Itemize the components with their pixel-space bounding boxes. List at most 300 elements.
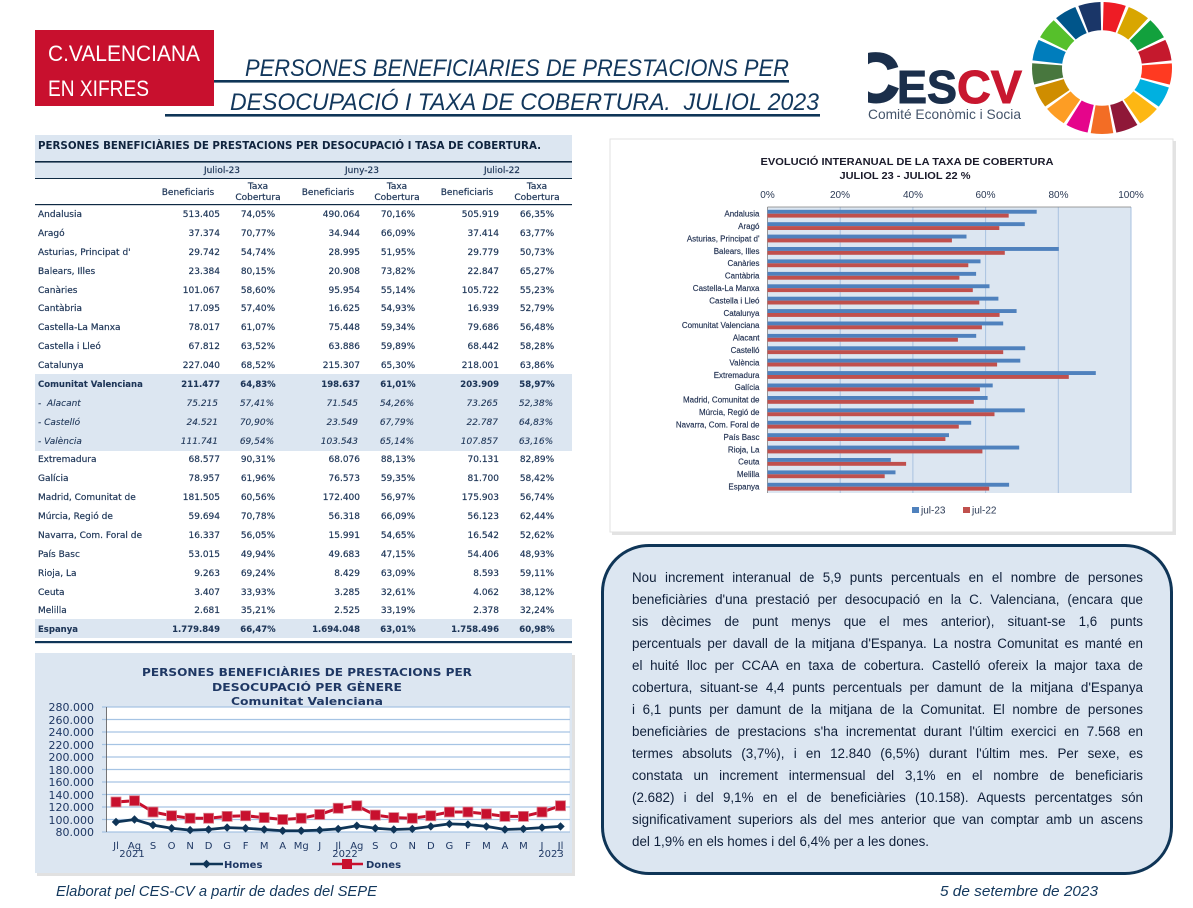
row: Canàries	[38, 286, 555, 296]
row: Espanya: 1.758.496	[451, 625, 499, 635]
row: Ceuta: 32,61%	[381, 588, 416, 598]
row: Cantàbria: 57,40%	[241, 304, 276, 314]
category labels: Comunitat Valenciana	[682, 321, 760, 330]
column headers: Cobertura	[514, 193, 560, 203]
row: València	[38, 436, 553, 447]
y axis labels: 80.000	[56, 826, 94, 839]
row: Canàries: 101.067	[183, 286, 220, 296]
axis labels: 80%	[1048, 190, 1069, 201]
category labels: Rioja, La	[728, 445, 760, 454]
axis labels: 60%	[975, 190, 996, 201]
row: Comunitat Valenciana: 64,83%	[240, 380, 276, 390]
category labels: Ceuta	[738, 458, 760, 467]
callout: commentary text box: sis dècimes de punt menys que el mes anterior), situant-se 1,6 punts	[632, 614, 1143, 629]
column headers	[162, 166, 560, 203]
row: Cantàbria: 16.939	[468, 304, 499, 314]
panel: line chart by gender	[35, 653, 575, 876]
row: Andalusia: 513.405	[183, 210, 220, 220]
row: Galícia: 58,42%	[520, 474, 555, 484]
row: Castelló: 24.521	[186, 418, 218, 428]
category labels: Espanya	[728, 482, 760, 492]
row: Espanya: Espanya	[38, 625, 78, 635]
row: Múrcia: 62,44%	[520, 512, 555, 522]
row: Andalusia: 490.064	[323, 210, 360, 220]
row: Rioja: 9.263	[194, 569, 220, 579]
row: Catalunya: Catalunya	[38, 361, 84, 371]
series: jul-23 bars	[768, 210, 1096, 487]
row: Ceuta: 3.407	[194, 588, 220, 598]
x axis labels: M	[519, 841, 528, 852]
column headers: Juliol-22	[483, 166, 520, 176]
x axis labels: J	[317, 841, 321, 852]
callout: commentary text box	[601, 544, 1173, 875]
x axis labels: D	[427, 841, 435, 852]
row: Castella i Lleó	[38, 341, 555, 352]
category labels: Navarra, Com. Foral de	[676, 420, 760, 430]
row: València: 103.543	[321, 437, 358, 447]
row: Cantàbria: Cantàbria	[38, 304, 82, 314]
row: Aragó: 34.944	[328, 229, 360, 239]
row: Andalusia: 505.919	[462, 210, 499, 220]
row: Ceuta: Ceuta	[38, 588, 65, 598]
row: Comunitat Valenciana: Comunitat Valenciana	[38, 380, 143, 390]
chart title: PERSONES BENEFICIÀRIES DE PRESTACIONS PER	[142, 666, 472, 679]
row: Melilla: 33,19%	[381, 606, 416, 616]
x axis labels: F	[243, 841, 249, 852]
series: Dones	[116, 801, 560, 820]
category labels: Madrid, Comunitat de	[683, 396, 760, 405]
row: Alacant: - Alacant	[38, 399, 81, 409]
row: Comunitat Valenciana: 58,97%	[519, 380, 555, 390]
x axis labels: Jl	[557, 841, 563, 852]
row: Espanya: 63,01%	[380, 625, 416, 635]
row: Rioja: 69,24%	[241, 569, 276, 579]
y axis labels: 240.000	[48, 726, 94, 739]
row: Múrcia: 66,09%	[381, 512, 416, 522]
callout: commentary text box: del 1,9% en els homes i del 6,4% per a les dones.	[632, 834, 929, 849]
row: València: 63,16%	[519, 437, 553, 447]
row: Extremadura: 88,13%	[381, 455, 416, 465]
row: Comunitat Valenciana: 198.637	[321, 380, 360, 390]
row: Cantàbria: 17.095	[188, 304, 220, 314]
row: Castella i Lleó: 58,28%	[520, 342, 555, 352]
chart title	[142, 666, 472, 708]
row: Rioja: 59,11%	[520, 569, 555, 579]
row: València: - València	[38, 436, 82, 447]
row: Melilla: Melilla	[38, 606, 67, 616]
date: 5 de setembre de 2023	[940, 884, 1098, 900]
row: València: 107.857	[461, 437, 498, 447]
row: Asturias: 50,73%	[520, 248, 555, 258]
row: Madrid: 175.903	[462, 493, 499, 503]
x axis labels: O	[168, 841, 176, 852]
row: Castella-La Manxa: 56,48%	[520, 323, 555, 333]
row: Castella i Lleó: 67.812	[188, 342, 220, 352]
logo: CES CV	[868, 52, 1022, 119]
title: DESOCUPACIÓ I TAXA DE COBERTURA. JULIOL 2023	[230, 89, 820, 116]
x axis labels: F	[465, 841, 471, 852]
row: Galícia: 81.700	[468, 474, 499, 484]
x axis labels: Ag	[128, 841, 141, 852]
row: Catalunya: 63,86%	[520, 361, 555, 371]
row: Madrid: 181.505	[183, 493, 220, 503]
row: Ceuta: 38,12%	[520, 588, 555, 598]
category labels: Balears, Illes	[714, 247, 760, 256]
row: Aragó: 70,77%	[241, 229, 276, 239]
row: Canàries: 58,60%	[241, 286, 276, 296]
x axis labels: G	[223, 841, 231, 852]
row: Galícia: 59,35%	[381, 474, 416, 484]
row: Múrcia	[38, 511, 555, 522]
category labels: Castella i Lleó	[709, 296, 760, 305]
row: Castelló	[38, 417, 553, 428]
chart title: JULIOL 23 - JULIOL 22 %	[840, 170, 971, 182]
category labels: Catalunya	[723, 309, 760, 318]
row: Comunitat Valenciana: 211.477	[181, 380, 220, 390]
callout: commentary text box: (2.682) i del 9,1% en el de beneficiàries (10.158). Aquests percentatges són	[632, 790, 1143, 805]
row: Andalusia: 66,35%	[520, 210, 555, 220]
row: Ceuta: 33,93%	[241, 588, 276, 598]
row: Castella i Lleó: 68.442	[468, 342, 499, 352]
y axis labels: 140.000	[48, 789, 94, 802]
y axis labels: 180.000	[48, 764, 94, 777]
row: Asturias: 28.995	[328, 248, 360, 258]
row: Asturias: Asturias, Principat d'	[38, 248, 131, 258]
column headers: Taxa	[526, 182, 547, 192]
y axis labels: 200.000	[48, 751, 94, 764]
row: Alacant: 71.545	[326, 399, 358, 409]
row: Comunitat Valenciana: 203.909	[460, 380, 499, 390]
x axis labels: O	[390, 841, 398, 852]
category labels: Extremadura	[714, 371, 760, 380]
row: Balears: Balears, Illes	[38, 267, 96, 277]
row: Extremadura: 68.076	[328, 455, 360, 465]
callout: commentary text box: significativament superiors als del mes anterior que van comptar amb un ascens	[632, 812, 1143, 827]
category labels: País Basc	[723, 433, 760, 442]
row: País Basc: 48,93%	[520, 550, 555, 560]
row: Castella i Lleó: 63,52%	[241, 342, 276, 352]
row: Castella-La Manxa: 79.686	[468, 323, 499, 333]
axis labels: 20%	[830, 190, 850, 201]
x axis labels: N	[186, 841, 194, 852]
title	[165, 55, 820, 117]
row: Extremadura: Extremadura	[38, 455, 96, 465]
row: País Basc: País Basc	[38, 550, 80, 560]
axis labels: 40%	[903, 190, 923, 201]
category labels: Castella-La Manxa	[693, 284, 760, 293]
chart title: DESOCUPACIÓ PER GÈNERE	[212, 681, 402, 694]
chart title: EVOLUCIÓ INTERANUAL DE LA TAXA DE COBERTURA	[760, 155, 1054, 168]
row: Espanya: 66,47%	[240, 625, 276, 635]
row: Castelló: - Castelló	[38, 417, 81, 428]
column headers: Beneficiaris	[441, 188, 494, 198]
row: Espanya: 60,98%	[519, 625, 555, 635]
row: Comunitat Valenciana	[38, 380, 555, 390]
x axis labels: N	[409, 841, 416, 852]
x axis labels: 2023	[538, 849, 564, 860]
row: Castella-La Manxa: 59,34%	[381, 323, 416, 333]
row: Castella-La Manxa: 75.448	[328, 323, 360, 333]
row: Castella-La Manxa: 78.017	[188, 323, 220, 333]
row: Rioja: 8.429	[334, 569, 360, 579]
series: jul-22 bars	[768, 214, 1069, 491]
category labels: València	[729, 358, 760, 367]
legend: jul-23	[920, 506, 946, 516]
row: Alacant: 75.215	[186, 399, 218, 409]
row: Catalunya: 218.001	[462, 361, 499, 371]
logo: CES CV: C	[849, 39, 900, 117]
row: Extremadura: 82,89%	[520, 455, 555, 465]
row: Galícia: Galícia	[38, 474, 68, 484]
row: Extremadura	[38, 455, 555, 465]
row: Castelló: 22.787	[466, 418, 498, 428]
row: Alacant: 57,41%	[240, 399, 274, 409]
row: Ceuta: 3.285	[334, 588, 360, 598]
row: Melilla	[38, 606, 555, 616]
row: Balears: 20.908	[328, 267, 360, 277]
row: Múrcia: 56.318	[328, 512, 360, 522]
row: Catalunya: 227.040	[183, 361, 220, 371]
x axis labels: S	[150, 841, 156, 852]
y axis labels: 220.000	[48, 739, 94, 752]
row: Rioja	[38, 569, 555, 579]
callout: commentary text box: percentuals per davall de la mitjana d'Espanya. La nostra Comunitat es manté en	[632, 636, 1143, 651]
row: Navarra: 52,62%	[520, 531, 555, 541]
panel: benefit recipients table	[35, 135, 572, 643]
logo: CES CV: ES	[897, 61, 957, 113]
row: Galícia: 61,96%	[241, 474, 276, 484]
x axis labels: G	[446, 841, 453, 852]
chart title	[760, 155, 1054, 182]
category labels: Múrcia, Regió de	[699, 408, 760, 417]
icon: SDG colour wheel	[1024, 0, 1180, 141]
row: Navarra	[38, 531, 555, 541]
x axis labels: A	[279, 841, 286, 852]
callout: commentary text box: termes absoluts (3,7%), i en 12.840 (6,5%) durant l'últim mes. Per sexe, es	[632, 746, 1143, 761]
legend: Dones	[366, 860, 401, 871]
x axis labels: Ag	[350, 841, 363, 852]
column headers: Cobertura	[235, 193, 281, 203]
table heading: PERSONES BENEFICIÀRIES DE PRESTACIONS PER DESOCUPACIÓ I TASA DE COBERTURA.	[38, 139, 541, 152]
row: Extremadura: 70.131	[468, 455, 499, 465]
category labels: Melilla	[737, 470, 760, 479]
row: València: 69,54%	[240, 437, 274, 447]
logo: CES CV: CV	[957, 61, 1022, 113]
row: Alacant: 73.265	[466, 399, 498, 409]
row: Asturias: 29.779	[468, 248, 499, 258]
x axis labels: S	[372, 841, 378, 852]
row: Asturias: 54,74%	[241, 248, 276, 258]
row: Galícia	[38, 474, 555, 484]
axis labels: 100%	[1118, 190, 1144, 201]
row: Múrcia: Múrcia, Regió de	[38, 511, 113, 522]
callout: commentary text box: i 6,1 punts per damunt de la mitjana de la Comunitat. El nombre de persones	[632, 702, 1143, 717]
row: País Basc: 53.015	[188, 550, 220, 560]
category labels: Canàries	[727, 259, 760, 268]
row: Castella-La Manxa: 61,07%	[241, 323, 276, 333]
row: Catalunya: 65,30%	[381, 361, 416, 371]
row: Canàries: 55,23%	[520, 286, 555, 296]
row: Balears: 22.847	[468, 267, 499, 277]
category labels: Alacant	[733, 334, 760, 343]
row: Balears: 23.384	[188, 267, 220, 277]
row: Madrid: 60,56%	[241, 493, 276, 503]
row: Alacant: 52,38%	[519, 399, 553, 409]
row: Múrcia: 56.123	[468, 512, 499, 522]
legend: jul-22	[971, 506, 997, 516]
y axis labels: 260.000	[48, 714, 94, 727]
x axis labels: Jl	[112, 841, 119, 852]
row: Espanya: 1.779.849	[172, 625, 220, 635]
row: Castella i Lleó: 59,89%	[381, 342, 416, 352]
category labels: Asturias, Principat d'	[687, 234, 760, 243]
row: València: 111.741	[181, 437, 218, 447]
row: Andalusia	[38, 210, 555, 220]
row: Navarra: Navarra, Com. Foral de	[38, 531, 142, 541]
row: Balears: 80,15%	[241, 267, 276, 277]
row: Andalusia: Andalusia	[38, 210, 82, 220]
row: Melilla: 2.681	[194, 606, 220, 616]
row: València: 65,14%	[380, 437, 414, 447]
callout: commentary text box: constata un increment intermensual del 3,1% en el nombre de beneficiaris	[632, 768, 1143, 783]
row: Castella-La Manxa: Castella-La Manxa	[38, 323, 121, 333]
row: Madrid: 56,74%	[520, 493, 555, 503]
callout: commentary text box: cobertura, situant-se 4,4 punts percentuals per damunt de la mitjana d'Espanya	[632, 680, 1143, 695]
series: Homes	[116, 820, 560, 831]
row: Aragó: 63,77%	[520, 229, 555, 239]
legend: Homes	[224, 860, 262, 871]
row: Canàries: Canàries	[38, 286, 78, 296]
row: Castella i Lleó: Castella i Lleó	[38, 341, 101, 352]
row: Madrid: 172.400	[323, 493, 360, 503]
row: Galícia: 78.957	[188, 474, 220, 484]
x axis labels: J	[540, 841, 543, 852]
legend	[190, 859, 401, 871]
column headers: Taxa	[247, 182, 268, 192]
row: País Basc: 54.406	[468, 550, 499, 560]
row: Castella i Lleó: 63.886	[328, 342, 360, 352]
x axis labels	[112, 841, 564, 860]
y axis labels: 100.000	[48, 814, 94, 827]
x axis labels: 2022	[332, 849, 358, 860]
title: PERSONES BENEFICIARIES DE PRESTACIONS PER	[245, 55, 789, 82]
column headers: Juny-23	[344, 166, 379, 176]
row: Navarra: 16.542	[468, 531, 499, 541]
column headers: Beneficiaris	[302, 188, 355, 198]
legend	[912, 506, 997, 516]
badge: C.Valenciana en xifres	[35, 30, 214, 106]
category labels: Galícia	[735, 383, 760, 392]
row: Cantàbria: 54,93%	[381, 304, 416, 314]
y axis labels: 120.000	[48, 801, 94, 814]
row: Alacant	[38, 399, 553, 409]
row: Andalusia: 74,05%	[241, 210, 276, 220]
row: Rioja: 63,09%	[381, 569, 416, 579]
column headers: Beneficiaris	[162, 188, 215, 198]
logo: CES CV: Comité Econòmic i Socia	[868, 106, 1021, 122]
row: Asturias: 29.742	[188, 248, 220, 258]
row: Catalunya: 215.307	[323, 361, 360, 371]
row: Catalunya: 68,52%	[241, 361, 276, 371]
row: Andalusia: 70,16%	[381, 210, 416, 220]
x axis labels: Mg	[294, 841, 309, 852]
row: Melilla: 2.525	[334, 606, 360, 616]
row: Aragó: 66,09%	[381, 229, 416, 239]
row: Castelló: 23.549	[326, 418, 358, 428]
row: Melilla: 35,21%	[241, 606, 276, 616]
row: Cantàbria: 16.625	[328, 304, 360, 314]
y axis labels	[48, 701, 94, 839]
row: Cantàbria: 52,79%	[520, 304, 555, 314]
category labels: Aragó	[738, 222, 760, 231]
row: Canàries: 95.954	[328, 286, 360, 296]
row: Castelló: 64,83%	[519, 418, 553, 428]
row: País Basc	[38, 550, 555, 560]
x axis labels: M	[260, 841, 269, 852]
row: Balears	[38, 267, 555, 277]
row: Navarra: 56,05%	[241, 531, 276, 541]
y axis labels: 160.000	[48, 776, 94, 789]
axis labels	[760, 190, 1144, 201]
row: Cantàbria	[38, 304, 555, 314]
callout: commentary text box: el huité lloc per CCAA en taxa de cobertura. Castelló ofereix la major taxa de	[632, 658, 1143, 673]
badge: C.Valenciana en xifres: C.VALENCIANA	[48, 41, 200, 66]
row: Comunitat Valenciana: 61,01%	[380, 380, 416, 390]
category labels: Andalusia	[724, 210, 760, 218]
row: Múrcia: 59.694	[188, 512, 220, 522]
category labels	[676, 210, 760, 492]
row: Navarra: 54,65%	[381, 531, 416, 541]
callout: commentary text box: Nou increment interanual de 5,9 punts percentuals en el nombre de persones	[632, 570, 1143, 585]
chart title: Comunitat Valenciana	[231, 696, 383, 708]
row: Catalunya	[38, 361, 555, 371]
source note: Elaborat pel CES-CV a partir de dades del SEPE	[56, 884, 377, 900]
row: Extremadura: 68.577	[188, 455, 220, 465]
x axis labels: 2021	[119, 849, 145, 860]
x axis labels: A	[501, 841, 508, 852]
row: País Basc: 49.683	[328, 550, 360, 560]
row: Madrid: Madrid, Comunitat de	[38, 493, 136, 503]
column headers: Juliol-23	[203, 166, 240, 176]
axis labels: 0%	[760, 190, 775, 201]
row: Balears: 73,82%	[381, 267, 416, 277]
row: Múrcia: 70,78%	[241, 512, 276, 522]
row: Madrid: 56,97%	[381, 493, 416, 503]
row: Alacant: 54,26%	[380, 399, 414, 409]
row: Espanya: 1.694.048	[312, 625, 360, 635]
callout: commentary text box: beneficiàries de prestacions s'ha incrementat durant l'últim exercici en 7.568 en	[632, 724, 1143, 739]
category labels: Castelló	[731, 346, 760, 355]
row: Castelló: 67,79%	[380, 418, 414, 428]
x axis labels: D	[205, 841, 213, 852]
category labels: Cantàbria	[725, 272, 760, 281]
column headers: Taxa	[386, 182, 407, 192]
y axis labels: 280.000	[48, 701, 94, 714]
row: Espanya	[38, 625, 555, 635]
row: Ceuta: 4.062	[473, 588, 499, 598]
row: Rioja: 8.593	[473, 569, 499, 579]
panel: coverage rate bar chart	[610, 139, 1176, 535]
row: País Basc: 49,94%	[241, 550, 276, 560]
row: Balears: 65,27%	[520, 267, 555, 277]
badge: C.Valenciana en xifres: EN XIFRES	[48, 76, 149, 101]
callout: commentary text box: beneficiàries d'una prestació per desocupació en la C. Valenciana, (encara que	[632, 592, 1143, 607]
x axis labels: Jl	[334, 841, 341, 852]
row: Aragó: 37.414	[468, 229, 499, 239]
row: Ceuta	[38, 588, 555, 598]
x axis labels: M	[482, 841, 491, 852]
row: Asturias	[38, 248, 555, 258]
